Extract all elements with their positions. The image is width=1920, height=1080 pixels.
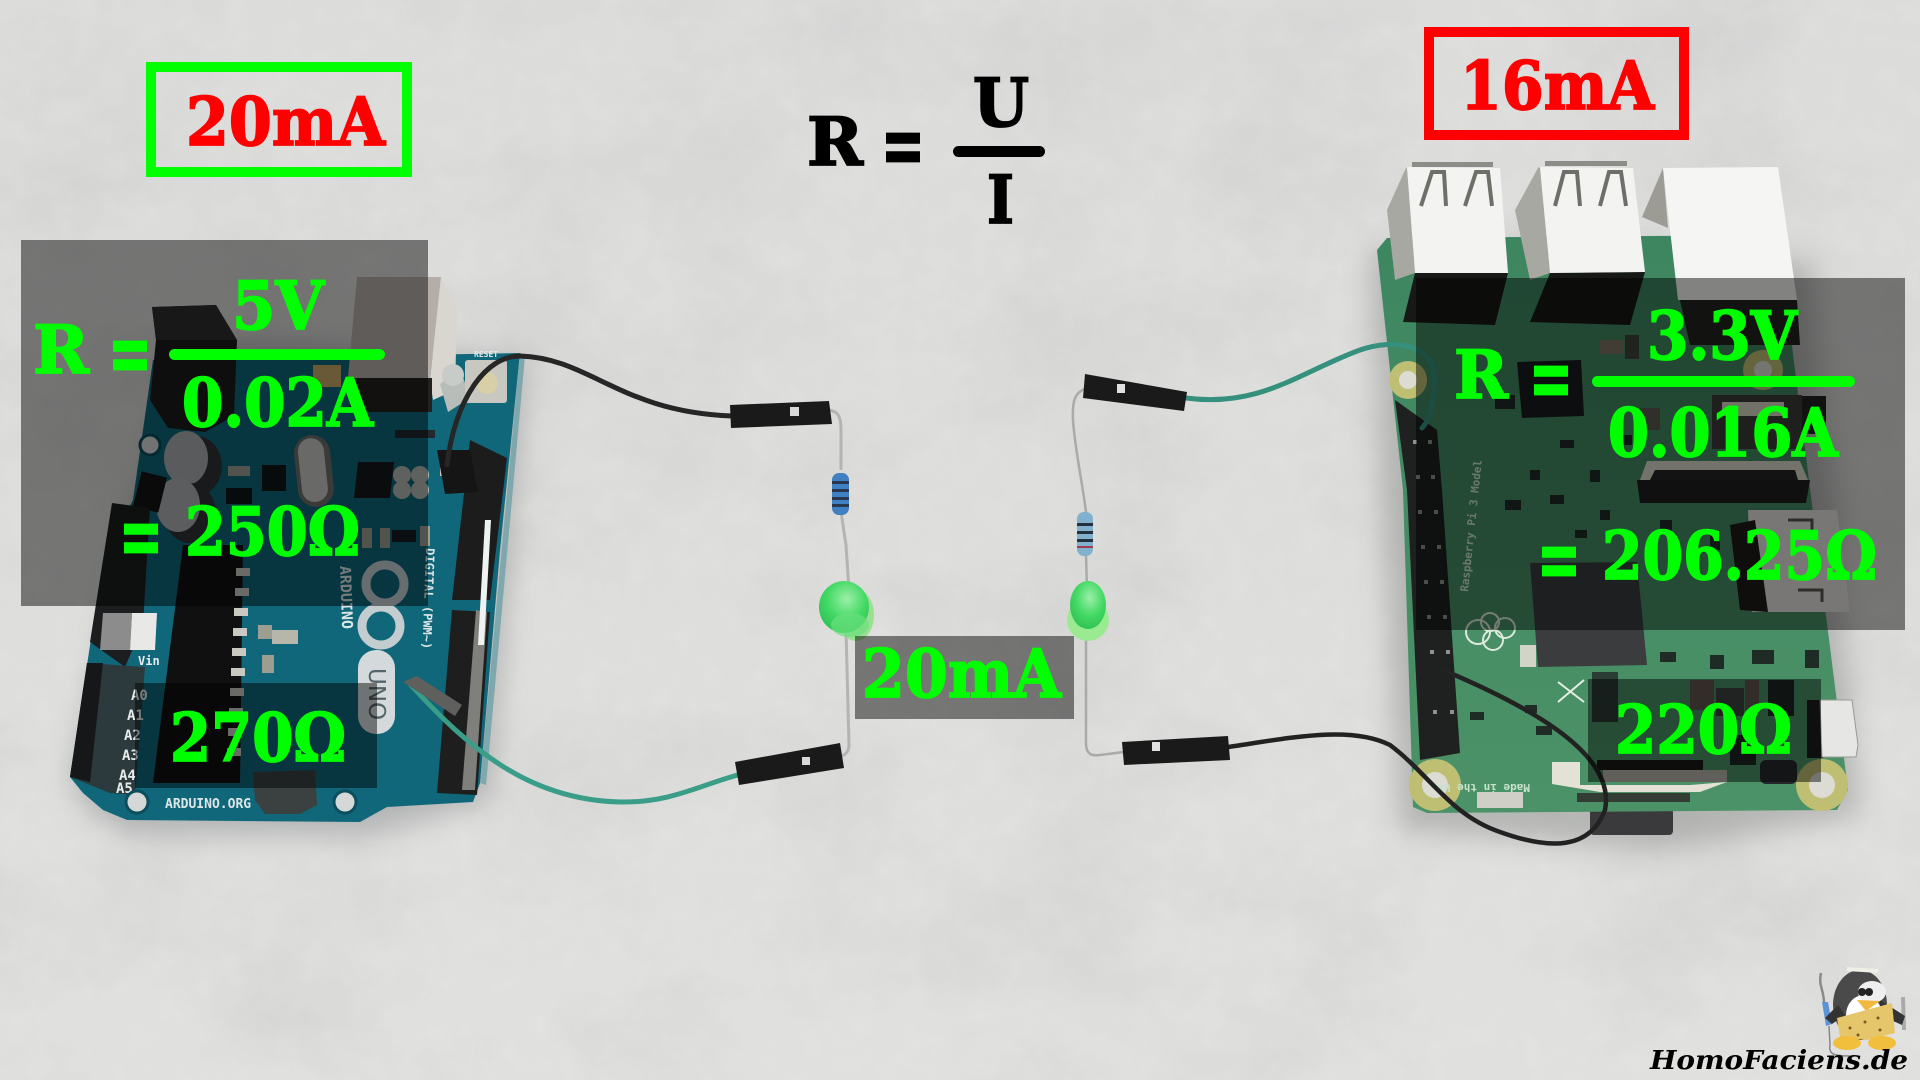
raspberry pi calculation: = [1529,328,1573,427]
digital pin headers [437,440,507,795]
Raspberry Pi board [1370,161,1860,850]
green LED [1067,581,1109,641]
power and analog pin headers: A0 [131,688,148,704]
general formula R = U / I [807,64,1045,239]
arduino calculation [33,267,385,585]
raspberry pi calculation: 206.25Ω [1602,517,1877,595]
raspberry pi calculation: 3.3V [1647,297,1799,375]
HDMI socket [1730,510,1850,612]
green LED [819,581,874,641]
UNO badge: UNO [363,668,389,720]
reset button [442,350,507,403]
blue resistor [832,473,849,515]
Arduino logo marks [362,565,404,645]
power and analog pin headers: A5 [116,781,133,797]
arduino calculation: = [108,303,152,402]
power and analog pin headers: A3 [122,748,139,764]
recycling bin mark [1558,680,1584,702]
surface-mount parts [1470,335,1819,735]
Raspberry logo mark [1466,613,1515,650]
raspberry pi current limit box [1429,32,1684,135]
arduino resistor panel [135,683,377,788]
wrench [1903,997,1904,1030]
arduino current limit box [151,67,407,172]
Arduino Uno board [70,277,525,835]
board lettering: ARDUINO [336,566,356,629]
raspberry pi calculation: 0.016A [1608,394,1839,472]
arduino calculation: = [119,486,163,585]
arduino calculation: R [33,311,90,389]
UNO badge [358,650,395,734]
top jumper connector [730,401,832,428]
USB interface chip [354,462,394,498]
small board text: Raspberry Pi 3 Model [1458,459,1485,592]
left circuit: connectors, resistor and LED [730,401,874,785]
power and analog pin headers: A4 [119,768,136,784]
green jumper wire, Arduino side [410,684,738,802]
general formula R = U / I: R [807,103,864,181]
ICSP header [253,770,317,814]
ATmega DIP chip [153,545,250,783]
general formula R = U / I: U [973,64,1029,142]
SD card [1590,808,1673,835]
crystal [292,433,336,509]
raspberry pi resistor panel [1588,679,1821,782]
bottom jumper connector [735,743,844,785]
arduino formula panel [21,240,428,606]
power and analog pin headers: A2 [124,728,141,744]
black power jack [150,305,237,432]
mounting holes [1389,350,1848,811]
logo wordmark: HomoFaciens.de [1649,1046,1908,1076]
small surface-mount parts [226,365,452,673]
audio jack [1712,395,1826,449]
arduino chosen resistor value: 270Ω [170,699,346,777]
mounting holes [126,435,356,813]
GPIO header [1395,400,1460,760]
black jumper wire, Arduino side [447,356,732,465]
general formula R = U / I: = [881,95,925,194]
right circuit: connectors, resistor and LED [1067,374,1230,765]
arduino calculation: 250Ω [185,493,360,571]
silver USB socket [348,277,470,412]
micro USB socket [1820,700,1858,757]
bottom jumper connector [1122,736,1230,765]
black jumper wire, Raspberry Pi side [1228,670,1606,844]
top jumper connector [1083,374,1187,411]
green jumper wire, Raspberry Pi side [1186,344,1434,428]
small board text [1437,459,1530,794]
processor and interface chips [1517,360,1823,784]
board lettering: DIGITAL (PWM~) [419,548,437,649]
soldering iron [1820,973,1850,1056]
LED current panel [855,636,1074,719]
board lettering [165,548,437,812]
Ethernet port [1642,167,1800,345]
arduino calculation: 0.02A [182,364,374,442]
small board text: Made in the UK [1437,781,1530,794]
logo: penguin mascot [1820,969,1905,1056]
USB ports [1387,161,1645,325]
raspberry pi calculation [1454,297,1877,608]
plug on Arduino digital header [403,676,462,716]
raspberry pi calculation: = [1537,509,1581,608]
arduino current limit box: 20mA [186,83,386,161]
blue resistor [1077,512,1093,556]
board lettering: ARDUINO.ORG [165,797,251,812]
capacitors [133,431,222,543]
raspberry pi calculation: R [1454,336,1509,414]
display connector [1477,760,1727,808]
camera connector [1637,461,1810,503]
general formula R = U / I: I [987,161,1014,239]
LED current value: 20mA [862,635,1062,713]
power and analog pin headers [70,503,160,797]
arduino calculation: 5V [232,267,326,345]
raspberry pi chosen resistor value: 220Ω [1615,691,1792,769]
raspberry pi formula panel [1416,278,1905,630]
raspberry pi current limit box: 16mA [1460,47,1655,125]
power and analog pin headers: Vin [138,654,160,668]
reset button: RESET [474,350,498,359]
power and analog pin headers: A1 [127,708,144,724]
